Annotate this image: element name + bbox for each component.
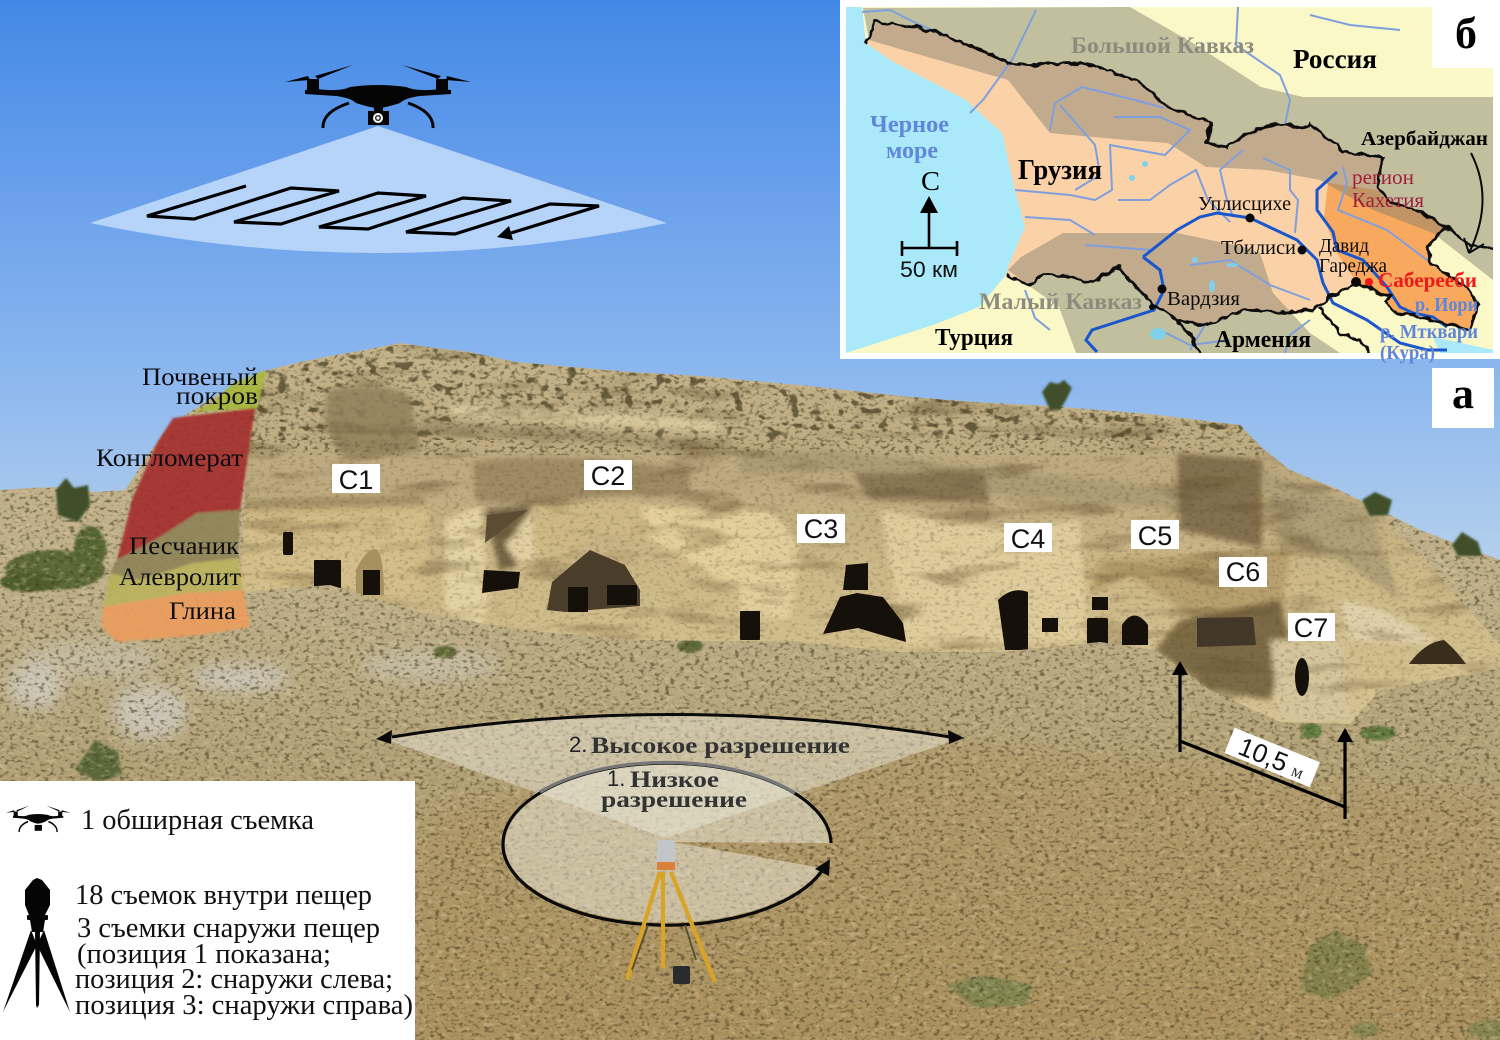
map site labels and dots: Давид [1319, 235, 1369, 257]
map country labels [935, 44, 1488, 353]
scanner resolution labels: 1. [607, 766, 625, 791]
map site labels and dots: Уплисцихе [1198, 193, 1291, 215]
label box: а: а [1452, 369, 1474, 418]
map country labels: Россия [1293, 44, 1377, 74]
map water labels: р. Мтквари [1380, 321, 1478, 343]
trees on skyline [56, 380, 1482, 556]
scanner high-resolution fan [381, 714, 962, 838]
cave openings [283, 510, 1466, 696]
north arrow and scale bar [900, 166, 958, 282]
upper vegetated band texture [240, 345, 1300, 455]
gray eroded slope patches [7, 640, 500, 740]
cave labels C1-C7: C4 [1011, 524, 1045, 554]
stratum: soil cover [193, 370, 267, 412]
map label box: б [1432, 0, 1500, 68]
Kakheti label [1352, 165, 1424, 212]
panel: location map [840, 0, 1500, 364]
sky background [0, 0, 1500, 560]
scanner resolution labels: 2. [569, 732, 587, 757]
cave labels C1-C7 [332, 460, 1335, 643]
map site labels and dots: Тбилиси [1221, 237, 1296, 259]
icon: small drone [6, 806, 70, 832]
legend text: scanner surveys: 18 съемок внутри пещер [75, 880, 372, 911]
icon: drone [285, 65, 471, 128]
slope texture [0, 340, 1500, 1040]
scanner low-resolution circle fill [503, 760, 831, 922]
cave labels C1-C7: C6 [1226, 557, 1260, 587]
map country labels: Грузия [1018, 155, 1102, 186]
strata labels: Песчаник [129, 533, 240, 560]
stratum: conglomerate [117, 408, 255, 560]
map site labels and dots: Гареджа [1319, 255, 1387, 277]
legend text: scanner surveys [75, 880, 413, 1021]
strata labels: покров [176, 383, 258, 410]
map panel letter: б [1455, 9, 1477, 58]
measure: 10,5 m [1172, 661, 1353, 819]
photo: cliff with caves and foreground slope [0, 340, 1500, 1040]
stratum: siltstone [103, 558, 243, 607]
scanner resolution labels [569, 732, 850, 812]
legend text: scanner surveys: позиция 3: снаружи справа) [75, 990, 413, 1021]
strata labels: Алевролит [119, 564, 241, 591]
strata labels: Почвеный [142, 364, 258, 391]
map region labels [979, 33, 1254, 314]
map region labels: Малый Кавказ [979, 289, 1142, 314]
north arrow and scale bar: С [921, 166, 940, 196]
scanner low-resolution circular arrow [503, 762, 831, 925]
map site labels and dots [1149, 193, 1477, 310]
cave labels C1-C7: C2 [591, 461, 625, 491]
strata labels: Глина [169, 598, 236, 625]
map water labels [870, 112, 1478, 364]
scanner resolution labels: разрешение [601, 787, 747, 812]
laser scanner on tripod [627, 840, 715, 984]
drone flight cone [90, 126, 667, 253]
cave labels C1-C7: C1 [339, 465, 373, 495]
cave labels C1-C7: C5 [1138, 521, 1172, 551]
lit rock and shadow shapes [240, 386, 1440, 720]
strata labels [96, 364, 258, 625]
north arrow and scale bar: 50 км [900, 257, 958, 282]
map site labels and dots: Вардзия [1167, 288, 1240, 310]
map country labels: Армения [1215, 327, 1311, 353]
map site labels and dots: Саберееби [1378, 268, 1477, 292]
drone flight path [147, 186, 599, 240]
icon: tripod scanner [3, 878, 70, 1012]
panel: legend [0, 781, 415, 1040]
label box: а [1432, 368, 1494, 428]
map water labels: р. Иори [1415, 294, 1478, 316]
map water labels: Черное [870, 112, 949, 138]
cave labels C1-C7: C3 [804, 514, 838, 544]
map water labels: море [886, 138, 938, 164]
deep brown foreground tint [430, 746, 1491, 876]
legend text: scanner surveys: (позиция 1 показана; [77, 939, 331, 970]
map region labels: Большой Кавказ [1071, 33, 1254, 58]
legend text: drone survey: 1 обширная съемка [81, 805, 315, 836]
legend text: scanner surveys: 3 съемки снаружи пещер [77, 913, 380, 944]
map country labels: Азербайджан [1361, 128, 1488, 150]
vegetation on slopes [0, 526, 1500, 1040]
cave labels C1-C7: C7 [1294, 613, 1328, 643]
Kakheti label: Кахетия [1352, 188, 1424, 212]
scanner resolution labels: Низкое [630, 767, 719, 792]
stratum: clay [102, 590, 250, 642]
measure: 10,5 m: 10,5 м [1234, 731, 1310, 785]
strata labels: Конгломерат [96, 445, 243, 472]
legend text: scanner surveys: позиция 2: снаружи слева; [75, 964, 393, 995]
map water labels: (Кура) [1380, 342, 1435, 364]
stratum: sandstone [107, 510, 240, 597]
strata overlay: soil, conglomerate, sandstone, siltstone, clay [102, 370, 267, 642]
scanner resolution labels: Высокое разрешение [591, 733, 850, 758]
cliff face [240, 340, 1500, 740]
map country labels: Турция [935, 325, 1013, 351]
scanner high-resolution arc with arrows [376, 714, 964, 744]
Kakheti label: регион [1352, 165, 1414, 189]
